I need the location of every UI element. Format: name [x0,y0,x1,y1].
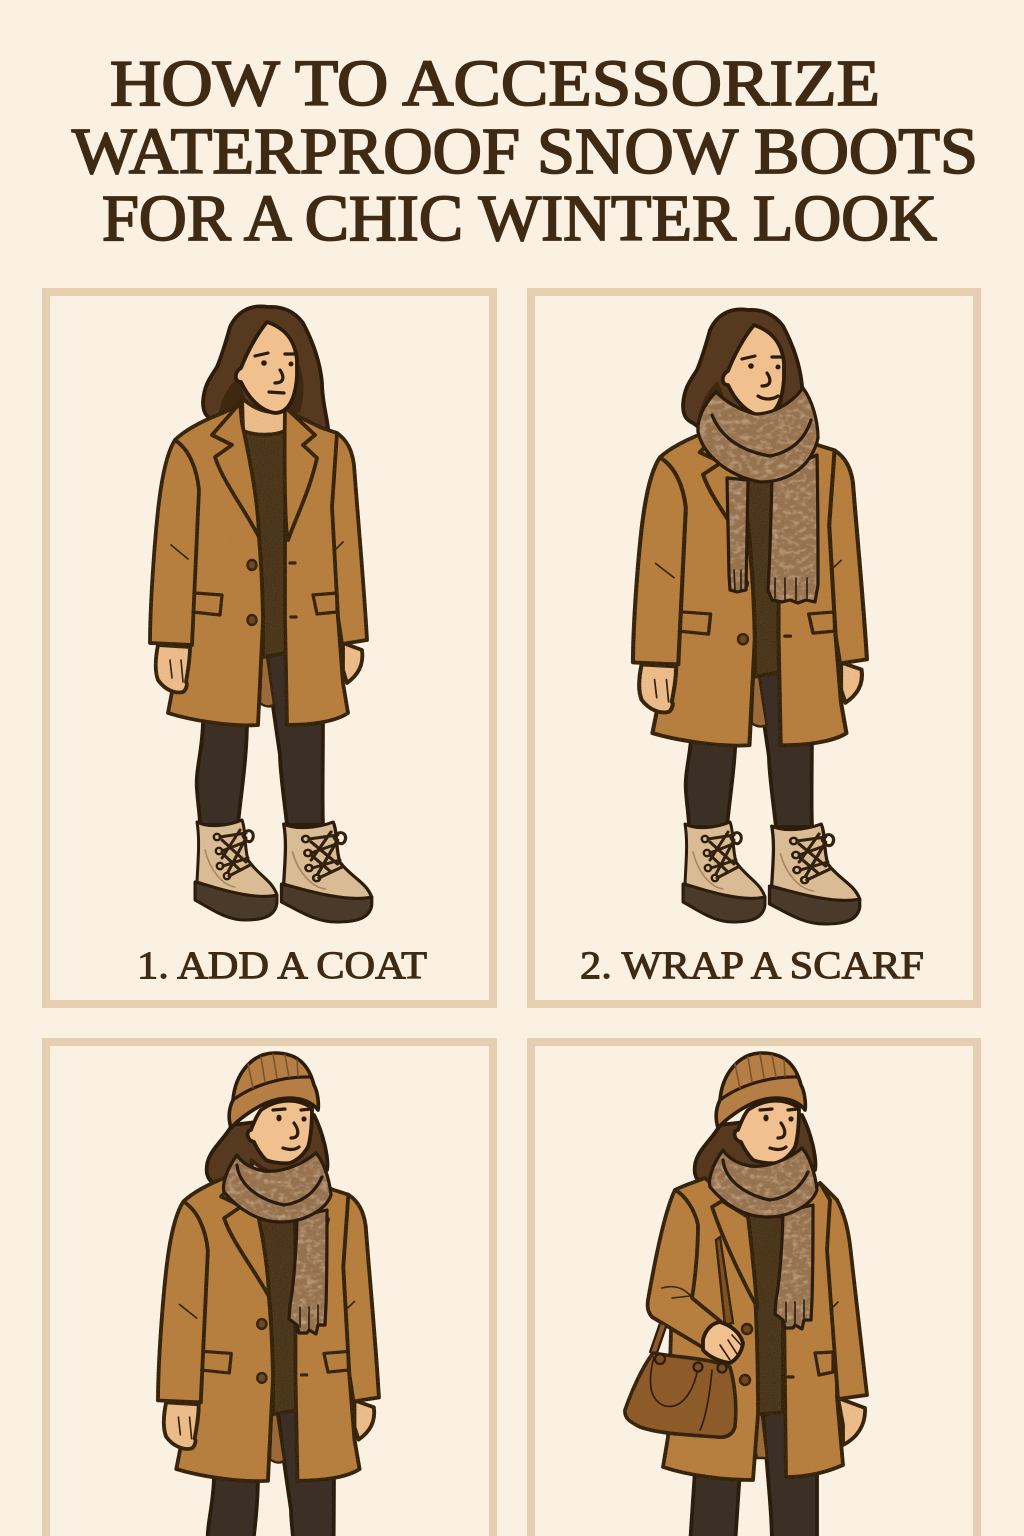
scarf [698,388,818,603]
handbag [625,1325,736,1437]
title: HOW TO ACCESSORIZE [110,47,880,120]
coat [648,1178,867,1480]
figure: woman with scarf [633,309,867,924]
legs [690,1410,817,1536]
hand holding bag [703,1322,743,1363]
panel 1: add a coat [46,292,493,1004]
title: FOR A CHIC WINTER LOOK [102,182,937,255]
title [72,47,978,255]
panel 3: hat [46,1042,493,1536]
strap over coat [716,1237,733,1325]
caption 1: 1. ADD A COAT [137,944,427,987]
figure: woman with handbag [625,1053,867,1536]
title: WATERPROOF SNOW BOOTS [72,115,978,188]
panel 4: bag [531,1042,977,1536]
caption 2: 2. WRAP A SCARF [580,944,924,987]
panel 2: wrap a scarf [531,292,977,1004]
figure: woman in coat [150,306,372,922]
figure: woman with hat and scarf [158,1053,379,1536]
